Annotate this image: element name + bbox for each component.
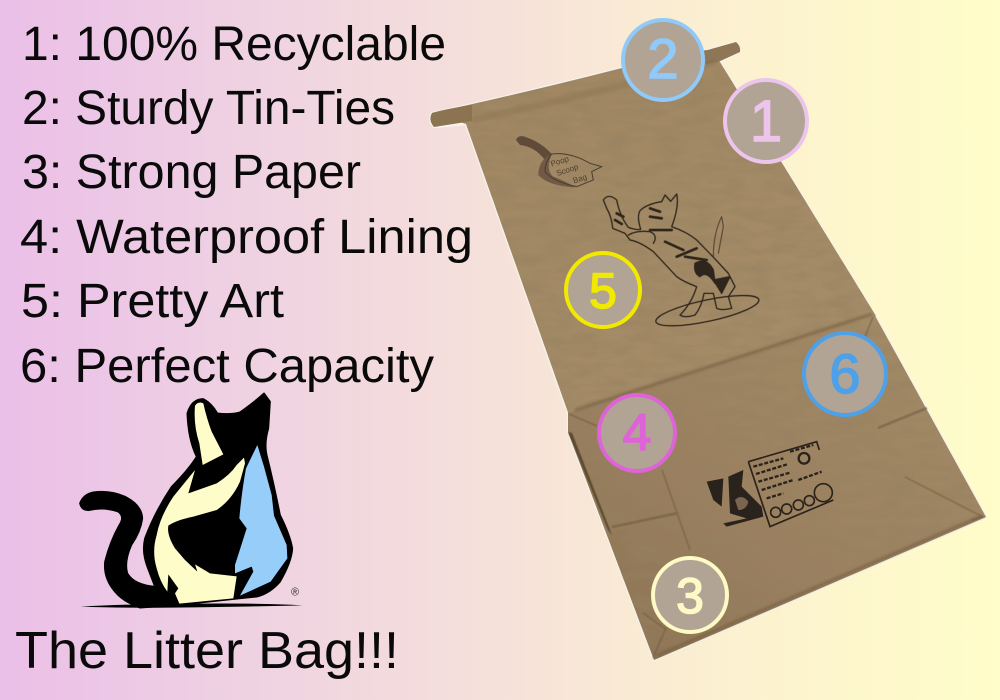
paper bag — [430, 42, 986, 660]
feature list — [20, 18, 473, 393]
badge — [653, 558, 727, 632]
feature 1: 1: 100% Recyclable — [22, 18, 446, 71]
stamped scoop — [516, 136, 602, 187]
logo wordmark: The Litter Bag!!! — [15, 622, 399, 680]
top seam shading — [472, 62, 716, 120]
tin tie left end — [430, 105, 472, 127]
badge — [725, 80, 807, 162]
bottom edge shadow — [656, 516, 982, 656]
scoop lettering line 3: Bag — [572, 172, 588, 185]
logo blue bag — [235, 445, 287, 596]
callout 5 — [566, 253, 640, 327]
package stamp — [707, 442, 833, 527]
callout 2 — [623, 20, 703, 100]
number: 3 — [676, 568, 704, 624]
number: 1 — [750, 89, 782, 154]
bag folded bottom — [568, 312, 986, 660]
bag upper body — [432, 50, 876, 418]
callout 6 — [804, 333, 886, 415]
logo black silhouette — [80, 393, 292, 608]
feature 2: 2: Sturdy Tin-Ties — [22, 82, 395, 135]
number: 2 — [647, 27, 679, 90]
logo cream markings — [154, 403, 245, 604]
scoop lettering line 2: Scoop — [555, 162, 580, 178]
badge — [566, 253, 640, 327]
callout 1 — [725, 80, 807, 162]
flap crease shading — [575, 314, 872, 410]
feature 3: 3: Strong Paper — [22, 146, 361, 199]
fold creases — [569, 317, 983, 658]
tin tie right end — [704, 42, 740, 64]
bag white cut-out edge — [430, 43, 986, 660]
feature 4: 4: Waterproof Lining — [20, 211, 473, 264]
scoop lettering: Poop — [550, 154, 571, 169]
callout 3 — [653, 558, 727, 632]
registered mark: ® — [291, 587, 299, 599]
bottom left shadow edge — [568, 432, 612, 535]
feature 6: 6: Perfect Capacity — [20, 340, 434, 393]
number: 6 — [829, 342, 861, 405]
badge — [599, 395, 675, 471]
callout 4 — [599, 395, 675, 471]
stamped cat — [603, 194, 761, 332]
cat logo — [80, 393, 303, 608]
badge — [804, 333, 886, 415]
number: 5 — [589, 263, 617, 319]
feature 5: 5: Pretty Art — [21, 275, 284, 328]
ground line — [81, 604, 303, 608]
badge — [623, 20, 703, 100]
number: 4 — [623, 404, 651, 462]
